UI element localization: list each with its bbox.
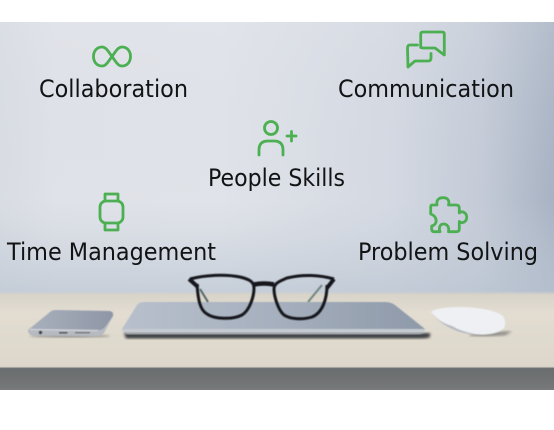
desk surface	[0, 293, 554, 369]
icon: infinity	[94, 47, 130, 66]
desk front edge	[0, 366, 554, 390]
glasses	[189, 275, 334, 319]
icon: puzzle piece	[431, 198, 467, 232]
wall	[0, 22, 554, 296]
label: Collaboration: Collaboration	[39, 75, 188, 103]
label: Communication: Communication	[338, 75, 514, 103]
label: Time Management: Time Management	[6, 238, 216, 266]
mouse	[431, 307, 512, 336]
label: People Skills: People Skills	[208, 164, 345, 192]
icon: smartwatch	[100, 194, 123, 230]
phone	[28, 310, 113, 338]
icon: person with plus	[259, 122, 296, 155]
label: Problem Solving: Problem Solving	[358, 238, 538, 266]
icon: speech bubbles	[408, 32, 444, 67]
laptop	[122, 302, 430, 338]
